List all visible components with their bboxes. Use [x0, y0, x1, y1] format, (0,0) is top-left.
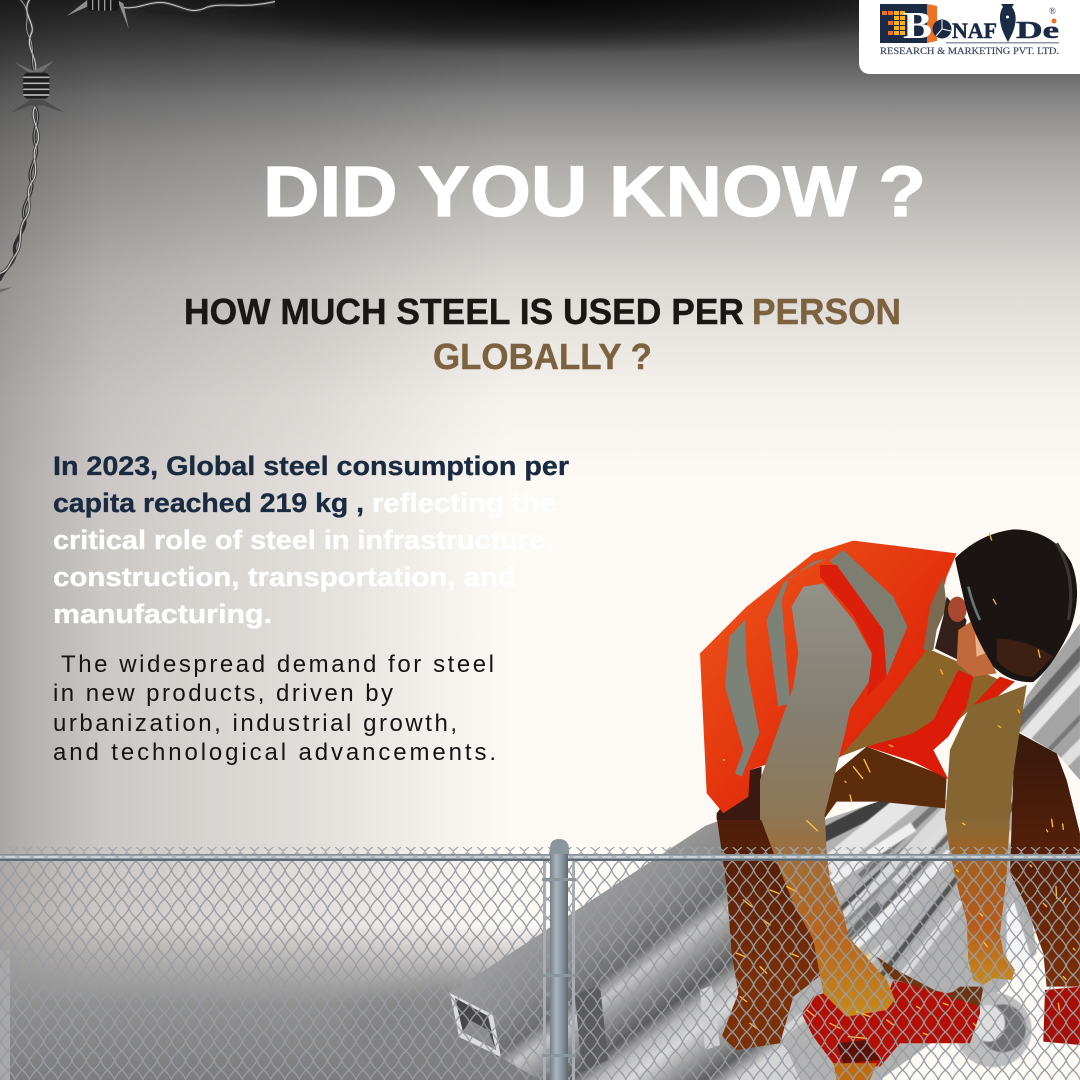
worker: [700, 529, 1080, 1080]
bold statistic paragraph: critical role of steel in infrastructure,: [53, 525, 553, 555]
steel bars behind worker: [782, 780, 1036, 1080]
torso: [840, 647, 1000, 760]
barbed wire: vertical strand: [0, 0, 65, 293]
right arm sleeve: [945, 685, 1027, 820]
bold statistic paragraph: reflecting the: [372, 488, 556, 518]
worker lower body: [717, 726, 1080, 1080]
logo card: [859, 0, 1080, 74]
reflective stripes: [830, 550, 907, 677]
sparks: [737, 726, 1075, 1038]
hard hat: [955, 529, 1077, 682]
chain-link fence: [0, 839, 1080, 1080]
grinder: [802, 980, 980, 1067]
logo wordmark: ®: [1049, 6, 1056, 16]
second tube end: [575, 985, 720, 1072]
barbed wire: horizontal strand: [67, 0, 275, 29]
round pipe: [955, 993, 1032, 1067]
subtitle: GLOBALLY ?: [433, 336, 652, 377]
steel profiles: [450, 620, 1080, 1080]
bold statistic paragraph: manufacturing.: [53, 599, 272, 629]
left forearm and glove: [760, 817, 895, 1017]
title: DID YOU KNOW ?: [263, 153, 926, 232]
worker upper body: [700, 529, 1077, 820]
ear: [948, 597, 967, 622]
hips behind vest: [717, 767, 762, 820]
supporting paragraph: urbanization, industrial growth,: [53, 710, 457, 737]
right boot: [1043, 987, 1080, 1045]
subtitle: [184, 291, 901, 377]
supporting paragraph: and technological advancements.: [53, 739, 496, 766]
logo wordmark: NAF: [952, 18, 997, 43]
steel bars right of helmet: [1020, 624, 1080, 780]
logo mark: [880, 4, 937, 47]
supporting paragraph: The widespread demand for steel: [61, 651, 494, 678]
bold statistic paragraph: construction, transportation, and: [53, 562, 516, 592]
logo wordmark: [932, 4, 1060, 44]
left arm sleeve: [760, 583, 872, 820]
bold statistic paragraph: In 2023, Global steel consumption per: [53, 451, 570, 481]
supporting paragraph: [53, 651, 496, 766]
beard: [935, 597, 967, 660]
logo mark: B: [903, 5, 932, 47]
lower vest strip: [867, 670, 973, 779]
top rail: [0, 854, 1080, 861]
sparks: [723, 533, 1040, 760]
logo tagline: RESEARCH & MARKETING PVT. LTD.: [880, 47, 1059, 57]
hand on grinder: [877, 957, 983, 1007]
subtitle: HOW MUCH STEEL IS USED PER: [184, 291, 744, 332]
face: [957, 620, 997, 677]
logo wordmark: De: [1016, 18, 1060, 44]
right forearm and glove: [945, 817, 1015, 985]
bold statistic paragraph: capita reached 219 kg ,: [53, 488, 364, 518]
bold statistic paragraph: [53, 451, 570, 629]
square tube end: [450, 993, 501, 1057]
collar: [923, 577, 947, 650]
trousers seat: [823, 747, 947, 820]
red strap over sleeve edge: [820, 565, 887, 697]
subtitle: PERSON: [752, 291, 901, 332]
fence post: [542, 839, 576, 1080]
right leg: [1010, 730, 1080, 987]
safety vest: [700, 541, 957, 813]
supporting paragraph: in new products, driven by: [53, 680, 393, 707]
barb coil: [11, 61, 65, 113]
left leg: [717, 817, 823, 1050]
